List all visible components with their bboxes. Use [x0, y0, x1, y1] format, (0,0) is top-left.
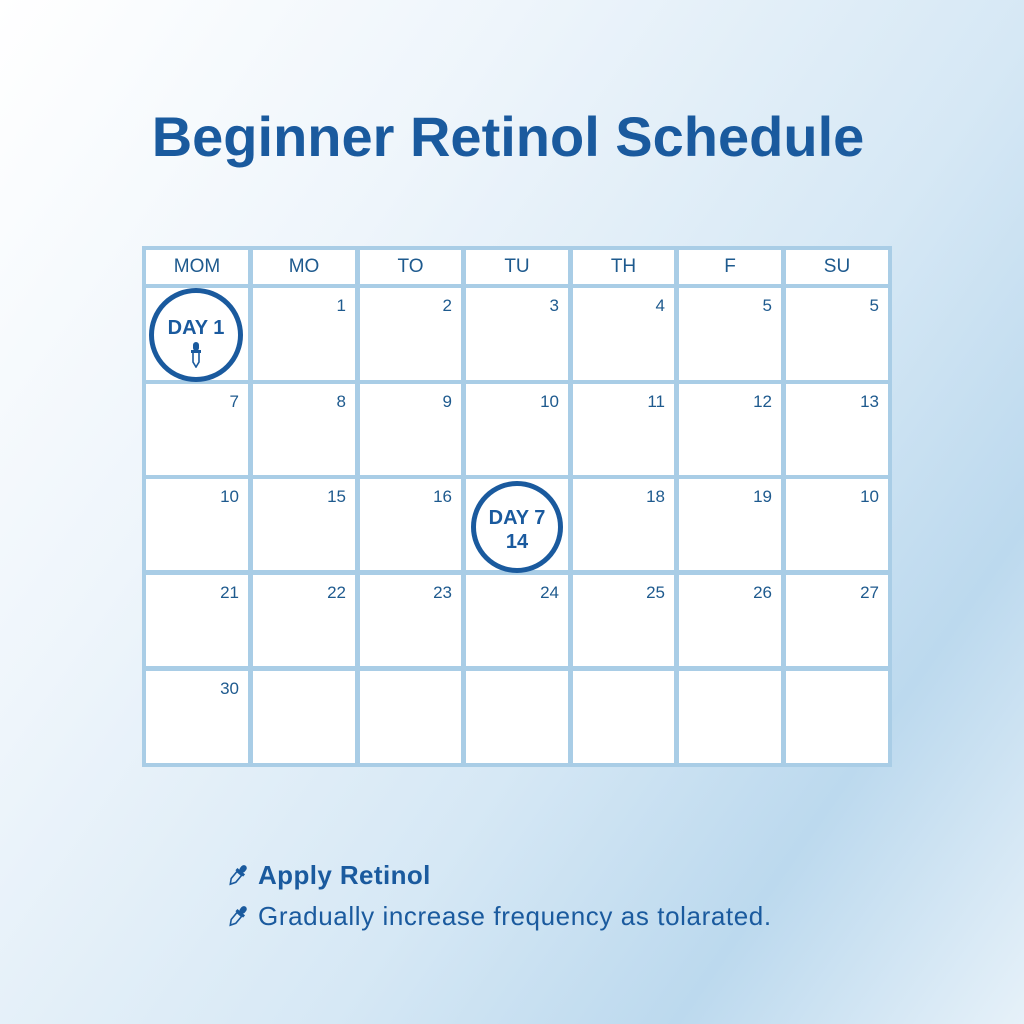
legend item: gradually increase: Gradually increase frequency as tolarated.	[258, 901, 772, 931]
calendar: SU	[824, 256, 850, 277]
header row	[146, 250, 888, 284]
calendar: 24	[540, 583, 559, 602]
calendar: TH	[611, 256, 636, 277]
calendar: 8	[337, 392, 346, 411]
title: Beginner Retinol Schedule	[152, 105, 864, 168]
calendar: MO	[289, 256, 319, 277]
day cells	[146, 288, 888, 763]
callout: day 1 circle	[149, 288, 243, 382]
calendar: 10	[220, 487, 239, 506]
calendar: 23	[433, 583, 452, 602]
calendar: 27	[860, 583, 879, 602]
calendar: 4	[656, 296, 665, 315]
calendar: 13	[860, 392, 879, 411]
callout: day 7 circle: DAY 7	[489, 507, 545, 529]
calendar: 25	[646, 583, 665, 602]
calendar: 11	[647, 392, 665, 411]
calendar: 10	[860, 487, 879, 506]
calendar: 19	[753, 487, 772, 506]
calendar: 7	[230, 392, 239, 411]
calendar: 16	[433, 487, 452, 506]
callout: day 1 circle: DAY 1	[168, 317, 224, 339]
calendar: 9	[443, 392, 452, 411]
calendar: F	[724, 256, 736, 277]
legend	[229, 860, 772, 931]
calendar: 5	[870, 296, 879, 315]
calendar: 1	[337, 296, 346, 315]
calendar: 26	[753, 583, 772, 602]
calendar: 5	[763, 296, 772, 315]
calendar: 30	[220, 679, 239, 698]
callout: day 7 circle	[471, 481, 563, 573]
calendar: TO	[397, 256, 424, 277]
calendar: 15	[327, 487, 346, 506]
calendar	[142, 246, 892, 767]
calendar: 10	[540, 392, 559, 411]
calendar: TU	[504, 256, 530, 277]
calendar: MOM	[174, 256, 220, 277]
callout: day 7 circle: 14	[506, 531, 528, 553]
icon: dropper	[191, 342, 201, 368]
calendar: 2	[443, 296, 452, 315]
calendar: 12	[753, 392, 772, 411]
calendar: 3	[550, 296, 559, 315]
legend item: apply retinol: Apply Retinol	[258, 860, 431, 890]
calendar: 21	[220, 583, 239, 602]
calendar: 22	[327, 583, 346, 602]
calendar: 18	[646, 487, 665, 506]
